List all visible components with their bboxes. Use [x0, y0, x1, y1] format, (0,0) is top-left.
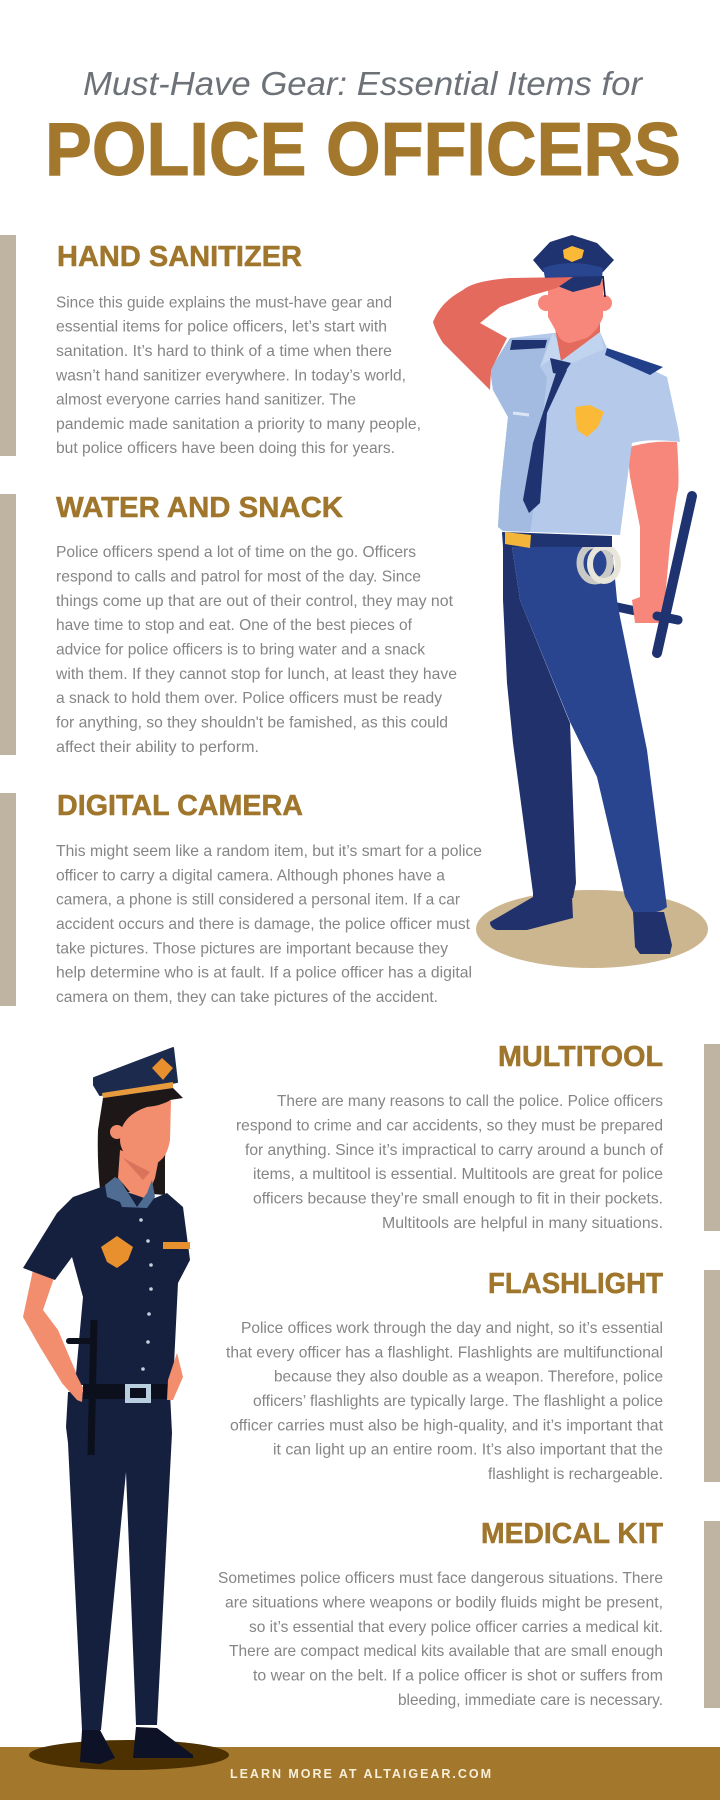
handcuffs	[580, 545, 618, 581]
right arm and hand	[627, 442, 678, 623]
right shoe	[633, 912, 672, 954]
cap band	[543, 263, 603, 278]
dark trouser leg	[503, 547, 576, 900]
ear left	[538, 295, 554, 311]
panel: flashlight	[226, 1268, 720, 1483]
body text: respond to calls and patrol for most of the day. Since	[56, 568, 421, 585]
body text: essential items for police officers, let’s start with	[56, 319, 387, 336]
panel: digital camera	[0, 790, 482, 1006]
illustration: saluting male officer	[433, 235, 708, 968]
title line: main: POLICE OFFICERS	[45, 107, 681, 191]
body text: things come up that are out of their control, they may not	[56, 593, 454, 610]
body text: advice for police officers is to bring water and a snack	[56, 642, 425, 658]
shirt shade	[490, 338, 550, 532]
collar	[105, 1177, 155, 1208]
cap badge	[152, 1058, 173, 1080]
body text: are situations where weapons or bodily fluids might be present,	[225, 1594, 663, 1611]
female shoes	[80, 1727, 193, 1764]
body text	[55, 544, 457, 756]
body text: There are many reasons to call the police. Police officers	[277, 1093, 663, 1110]
body text: Police offices work through the day and night, so it’s essential	[241, 1320, 663, 1337]
belt buckle	[505, 532, 531, 548]
heading: FLASHLIGHT	[488, 1268, 663, 1300]
tie	[523, 358, 571, 513]
cap strap	[603, 276, 605, 297]
body text: camera, a phone is still considered a personal item. If a car	[56, 892, 460, 909]
side bar	[704, 1270, 720, 1482]
side bar	[704, 1521, 720, 1708]
belt	[83, 1384, 171, 1399]
shirt	[490, 332, 680, 535]
panel: multitool	[236, 1041, 720, 1232]
body text	[226, 1320, 664, 1483]
belt buckle	[125, 1384, 151, 1403]
baton handle	[617, 607, 678, 620]
ground ellipse	[476, 890, 708, 968]
side bar	[0, 793, 16, 1006]
baton	[657, 496, 692, 653]
body text: have time to stop and eat. One of the best pieces of	[56, 617, 413, 634]
body text: for anything, so they shouldn't be famished, as this could	[56, 715, 448, 732]
body text: help determine who is at fault. If a police officer has a digital	[56, 965, 472, 982]
left shoe	[490, 897, 573, 930]
baton handle	[69, 1338, 92, 1344]
body text: officer to carry a digital camera. Although phones have a	[56, 867, 445, 884]
left hand	[60, 1345, 83, 1402]
saluting arm	[433, 277, 573, 390]
cap crown	[533, 235, 614, 272]
body text: it can light up an entire room. It’s also important that the	[273, 1442, 663, 1459]
neck	[118, 1150, 158, 1207]
title line: subtitle: Must-Have Gear: Essential Items for	[83, 65, 644, 102]
pocket line	[513, 413, 529, 415]
body text: sanitation. It’s hard to think of a time when there	[56, 343, 392, 360]
face	[548, 280, 603, 343]
body text: a snack to hold them over. Police officers must be ready	[56, 690, 442, 707]
shirt	[23, 1185, 190, 1385]
body text: items, a multitool is essential. Multitools are great for police	[253, 1166, 663, 1183]
body text: officer carries must also be high-quality, and it’s important that	[230, 1417, 664, 1434]
neck	[555, 322, 600, 361]
panel: water and snack	[0, 492, 457, 756]
trousers	[66, 1392, 172, 1730]
body text: There are compact medical kits available that are small enough	[229, 1643, 663, 1660]
body text: officers because they’re small enough to fit in their pockets.	[253, 1191, 663, 1208]
body text: wasn’t hand sanitizer everywhere. In today’s world,	[55, 367, 406, 384]
collar left	[540, 333, 561, 367]
body text: Since this guide explains the must-have gear and	[56, 294, 392, 311]
neck shadow	[123, 1158, 150, 1180]
body text: for anything. Since it’s impractical to carry around a bunch of	[245, 1142, 664, 1159]
body text: that every officer has a flashlight. Flashlights are multifunctional	[226, 1344, 663, 1361]
hair	[98, 1098, 170, 1195]
body text: but police officers have been doing this for years.	[56, 440, 395, 457]
body text: to wear on the belt. If a police officer is shot or suffers from	[253, 1668, 663, 1685]
heading: DIGITAL CAMERA	[57, 790, 303, 822]
right hand	[167, 1353, 183, 1400]
body text: This might seem like a random item, but it’s smart for a police	[56, 843, 482, 860]
heading: HAND SANITIZER	[57, 241, 302, 273]
body text: Sometimes police officers must face dangerous situations. There	[218, 1570, 663, 1587]
face	[120, 1100, 171, 1170]
side bar	[0, 235, 16, 456]
cap	[94, 1048, 177, 1095]
footer band	[0, 1727, 720, 1800]
body text	[55, 294, 421, 457]
panel: medical kit	[218, 1518, 720, 1709]
body text: bleeding, immediate care is necessary.	[398, 1692, 663, 1709]
belt	[502, 532, 612, 547]
ear	[110, 1125, 124, 1139]
light trouser leg	[512, 547, 667, 912]
panel: hand sanitizer	[0, 235, 421, 457]
body text: Multitools are helpful in many situations.	[382, 1215, 663, 1232]
body text	[56, 843, 482, 1006]
footer shadow	[29, 1740, 229, 1770]
collar right	[561, 332, 604, 364]
illustration: female officer	[23, 1048, 190, 1730]
body text: because they also double as a weapon. Therefore, police	[274, 1369, 663, 1386]
footer text: LEARN MORE AT ALTAIGEAR.COM	[230, 1767, 491, 1781]
body text	[218, 1570, 663, 1709]
ear right	[596, 295, 612, 311]
body text: flashlight is rechargeable.	[488, 1466, 663, 1483]
title	[45, 65, 681, 191]
side bar	[704, 1044, 720, 1231]
shirt badge	[101, 1236, 133, 1268]
left epaulette	[510, 340, 547, 350]
cap band	[102, 1082, 173, 1098]
heading: WATER AND SNACK	[56, 492, 343, 524]
cap visor	[103, 1088, 183, 1112]
body text: affect their ability to perform.	[56, 739, 259, 756]
cap badge	[563, 246, 584, 262]
baton handle front	[657, 616, 678, 620]
body text: almost everyone carries hand sanitizer. The	[56, 392, 356, 409]
right epaulette	[605, 348, 663, 375]
shirt badge	[575, 405, 604, 437]
body text: pandemic made sanitation a priority to many people,	[56, 416, 421, 433]
body text: respond to crime and car accidents, so they must be prepared	[236, 1117, 663, 1134]
cap visor	[555, 276, 603, 292]
shirt buttons	[139, 1218, 153, 1371]
body text: take pictures. Those pictures are important because they	[56, 940, 448, 957]
left arm	[23, 1270, 83, 1402]
baton	[91, 1320, 94, 1455]
name bar	[163, 1242, 190, 1249]
body text: with them. If they cannot stop for lunch, at least they have	[55, 666, 457, 683]
body text: so it’s essential that every police officer carries a medical kit.	[249, 1619, 663, 1636]
body text: accident occurs and there is damage, the police officer must	[56, 916, 471, 933]
body text: Police officers spend a lot of time on the go. Officers	[56, 544, 416, 561]
body text: camera on them, they can take pictures of the accident.	[56, 989, 438, 1006]
body text	[236, 1093, 664, 1232]
hand at cap	[533, 277, 573, 295]
body text: officers’ flashlights are typically large. The flashlight a police	[253, 1393, 663, 1410]
side bar	[0, 494, 16, 755]
heading: MULTITOOL	[498, 1041, 663, 1073]
heading: MEDICAL KIT	[481, 1518, 663, 1550]
